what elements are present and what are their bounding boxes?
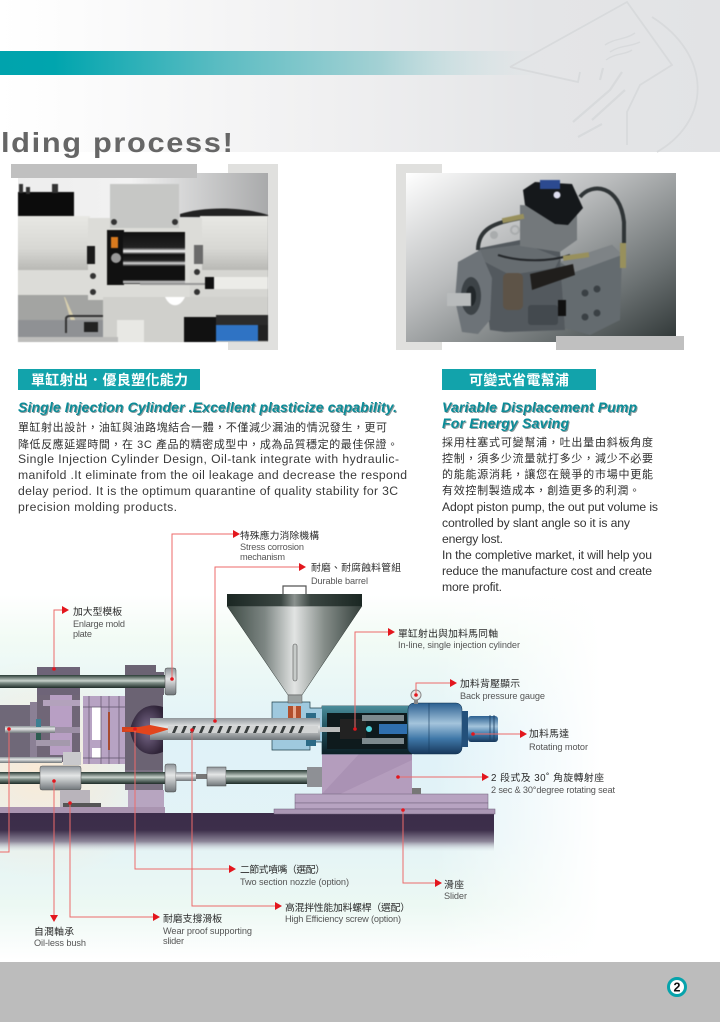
text block: single injection cylinder: delay period. It is the optimum quarantine of quality stability for 3C (18, 484, 398, 498)
fixed platen (125, 665, 164, 809)
motor (408, 703, 498, 754)
hopper (227, 586, 362, 703)
callout: wear proof slider: Wear proof supporting (163, 926, 252, 936)
callout: stress corrosion mechanism: 特殊應力消除機構 (240, 529, 319, 542)
callout: back pressure gauge (414, 677, 545, 701)
text block: variable pump: 的能能源消耗，讓您在競爭的市場中更能 (442, 467, 653, 481)
callout: enlarge mold plate: 加大型模板 (73, 605, 122, 618)
cylinder (322, 706, 412, 754)
diagram background (0, 595, 620, 960)
text block: variable pump (442, 399, 658, 594)
callout: rotating motor: Rotating motor (529, 742, 588, 752)
title: lding process! (1, 128, 233, 159)
callout: durable barrel (213, 561, 401, 723)
injection unit (122, 586, 498, 814)
feed throat (272, 702, 412, 754)
teal stripe (0, 51, 545, 75)
gauge (411, 690, 421, 704)
callout: back pressure gauge: Back pressure gauge (460, 691, 545, 701)
text block: single injection cylinder: Single Injection Cylinder .Excellent plasticize capability. (18, 399, 397, 415)
text block: single injection cylinder: 單缸射出設計，油缸與油路塊結合一體，不僅減少漏油的情況發生，更可 (18, 420, 387, 434)
callout: enlarge mold plate: plate (73, 629, 92, 639)
machine diagram (0, 586, 620, 960)
callout: stress corrosion mechanism (170, 529, 319, 681)
text block: single injection cylinder: manifold .It eliminate from the oil leakage and decrease the respond (18, 468, 407, 482)
callout: durable barrel: Durable barrel (311, 576, 368, 586)
callout: wear proof slider: slider (163, 936, 184, 946)
text block: single injection cylinder: precision molding products. (18, 500, 177, 514)
mold (83, 696, 125, 764)
clamping unit (0, 665, 322, 813)
callout: rotating seat: 2 sec & 30°degree rotating seat (491, 785, 615, 795)
text block: variable pump: 控制，須多少流量就打多少，減少不必要 (442, 451, 653, 465)
callout: rotating seat (396, 771, 615, 795)
callout: in-line single injection cylinder: In-line, single injection cylinder (398, 640, 520, 650)
callout: wear proof slider (68, 801, 252, 946)
callout: two section nozzle: Two section nozzle (option) (240, 877, 349, 887)
callout: oil-less bush: Oil-less bush (34, 938, 86, 948)
seat (322, 753, 412, 794)
callout: durable barrel: 耐磨、耐腐蝕料管組 (311, 561, 401, 574)
callout: two section nozzle: 二節式噴嘴（選配） (240, 863, 325, 876)
callout: enlarge mold plate: Enlarge mold (73, 619, 125, 629)
text block: variable pump: 有效控制製造成本，創造更多的利潤。 (442, 483, 640, 497)
callout: oil-less bush: 自潤軸承 (34, 925, 74, 938)
callout: two section nozzle (133, 727, 349, 887)
callout: oil-less bush (34, 779, 86, 948)
text block: variable pump: Adopt piston pump, the out put volume is (442, 500, 658, 514)
text block: single injection cylinder (18, 399, 407, 514)
footer band (0, 962, 720, 1022)
text block: variable pump: For Energy Saving (442, 415, 569, 431)
heading bar: variable pump: 可變式省電幫浦 (469, 372, 569, 388)
text block: single injection cylinder: 降低反應延遲時間，在 3C 產品的精密成型中，成為品質穩定的最佳保證。 (18, 437, 398, 451)
callout: enlarge mold plate (52, 605, 125, 671)
barrel and screw (150, 718, 320, 740)
photo panel: variable pump (396, 164, 684, 350)
callout: high efficiency screw (190, 728, 410, 924)
text block: variable pump: energy lost. (442, 532, 503, 546)
text block: variable pump: 採用柱塞式可變幫浦，吐出量由斜板角度 (442, 435, 653, 449)
callout: slider: Slider (444, 891, 467, 901)
text block: variable pump: more profit. (442, 580, 502, 594)
page number: 2 (674, 980, 681, 994)
callout: rotating motor (471, 727, 588, 752)
callout: back pressure gauge: 加料背壓顯示 (460, 677, 520, 690)
page number (668, 978, 686, 996)
slider and base (60, 790, 90, 808)
heading bar: single cylinder: 單缸射出．優良塑化能力 (31, 372, 188, 388)
text block: variable pump: controlled by slant angle so it is any (442, 516, 631, 530)
callout: clamp leader (0, 727, 11, 852)
callout: high efficiency screw: 高混拌性能加料螺桿（選配） (285, 901, 410, 914)
callout: wear proof slider: 耐磨支撐滑板 (163, 912, 222, 925)
callout: slider (401, 808, 467, 901)
heading bar: variable pump (442, 369, 596, 390)
callout: stress corrosion mechanism: Stress corrosion (240, 542, 304, 552)
floor (0, 813, 494, 851)
photo panel: injection cylinder (11, 164, 278, 350)
callout: high efficiency screw: High Efficiency screw (option) (285, 914, 401, 924)
tie bars (37, 667, 80, 675)
callout: in-line single injection cylinder (353, 627, 520, 731)
callout: rotating seat: 2 段式及 30˚ 角旋轉射座 (491, 771, 604, 784)
callout: rotating motor: 加料馬達 (529, 727, 569, 740)
callout: in-line single injection cylinder: 單缸射出與加料馬同軸 (398, 627, 498, 640)
heading bar: single cylinder (18, 369, 200, 390)
text block: single injection cylinder: Single Injection Cylinder Design, Oil-tank integrate with hydraulic- (18, 452, 399, 466)
callout: stress corrosion mechanism: mechanism (240, 552, 285, 562)
text block: variable pump: In the completive market, it will help you (442, 548, 652, 562)
header band (0, 0, 720, 152)
callout: slider: 滑座 (444, 878, 464, 891)
text block: variable pump: Variable Displacement Pump (442, 399, 637, 415)
watermark logo (510, 2, 698, 152)
text block: variable pump: reduce the manufacture cost and create (442, 564, 652, 578)
